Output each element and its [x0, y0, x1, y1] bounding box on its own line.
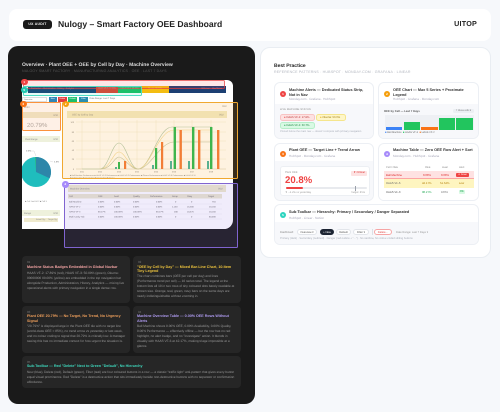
table header: Target Qty	[48, 218, 57, 220]
machine table: 0.00%	[98, 216, 104, 218]
finding body: alongside Production, Administration, History, Analytics — mixing live	[27, 280, 124, 284]
chip: HAAS VF-3	[280, 122, 315, 128]
card title: Not in Nav	[289, 92, 308, 96]
pill: overview: Overview ▾	[300, 231, 314, 234]
card title	[393, 88, 464, 97]
card title: Machine Table — Zero OEE Row Alert + Sort	[393, 148, 473, 152]
status badge: yellow: Okuma: 00.00%	[148, 88, 162, 90]
show cells control	[453, 109, 474, 113]
nav user links: Welcome User Name	[201, 88, 222, 90]
finding title	[137, 264, 231, 273]
card body	[275, 222, 478, 244]
mixed bar and line chart: 20	[72, 158, 75, 161]
machine table: Ball Machine	[69, 200, 82, 204]
target progress bar	[286, 187, 367, 189]
machine table: 20,160	[209, 210, 216, 214]
dashboard screenshot	[22, 80, 233, 229]
finding body	[137, 324, 231, 348]
machine table: 0.00%	[114, 206, 120, 208]
finding title: "OEE by Cell by Day" — Mixed Bar-Line Chart, 10-Item	[137, 264, 231, 268]
mixed bar and line chart: 0/32	[222, 105, 227, 108]
chart card: OEE by Cell by Day	[66, 102, 231, 182]
finding body: The chart combines bars (OEE per cell per day) and lines	[137, 274, 218, 278]
card: sub-toolbar	[274, 204, 479, 245]
finding body: seeing this has no immediate context for how urgent the situation is.	[27, 338, 123, 342]
table header: OEE	[425, 166, 430, 169]
marker 2: 2	[65, 102, 67, 106]
finding title: Plant OEE 20.79% — No Target, No Trend, No Urgency	[27, 314, 121, 318]
machine table: Scrap	[172, 195, 178, 198]
machine table: 100.00%	[114, 210, 123, 214]
machine table: Cell	[69, 195, 73, 198]
pill: filter: Filter ▾	[357, 231, 365, 234]
marker 3: 3	[22, 102, 24, 106]
pie header strip	[22, 136, 60, 142]
target caption: Target: 85%	[351, 190, 365, 194]
bar: HAAS VF-3	[404, 122, 420, 130]
chip: HAAS VF-3: ● HAAS VF-3: 50.7%	[284, 124, 309, 127]
card source: Monday.com · HubSpot · Grafana	[393, 154, 439, 158]
machine table: Machine Overview	[70, 188, 90, 190]
card title: OEE Chart — Max 5 Series + Proximate	[393, 88, 464, 92]
number icon: 2	[386, 92, 388, 96]
mixed bar and line chart: 5/06	[172, 170, 177, 174]
button: new	[49, 97, 56, 102]
strip note: Pinned below the main nav — doesn't compete with primary navigation	[280, 130, 361, 133]
mixed bar and line chart: 80	[72, 131, 75, 134]
finding 5	[22, 356, 241, 388]
finding title	[27, 314, 121, 323]
machine table: 0	[191, 216, 193, 218]
button: default	[68, 97, 77, 102]
finding body: nearly indistinguishable without zooming in.	[137, 294, 198, 298]
pill: new (primary)	[320, 229, 334, 235]
finding body: glance.	[137, 344, 147, 348]
mixed bar and line chart: 5/05	[154, 170, 159, 174]
mixed bar and line chart: 100	[71, 121, 75, 124]
card header strip: 0/32	[53, 212, 58, 214]
panel: dark audit of current design	[8, 46, 255, 404]
finding body: (Performance trend per cell) — 10 series total. The legend at the	[137, 278, 228, 282]
finding body: HAAS VF-2: 17.89% (red), HAAS VF-3: 50.00% (green), Okuma:	[27, 270, 119, 274]
row: HAAS VF-6: HAAS VF-6	[386, 181, 400, 185]
row: HAAS VF-6: 42.17%	[422, 181, 432, 185]
machine table: Quality	[133, 195, 141, 198]
finding number: 01	[27, 260, 30, 264]
machine table: 100.00%	[133, 210, 142, 214]
machine table: HAAS VF-3	[69, 210, 81, 214]
status badge: red: HAAS VF-2: 17.89%	[98, 88, 116, 90]
finding body: screen size. Orange, teal, green, navy bars on the same days are	[137, 288, 230, 292]
status badge: red	[96, 86, 118, 93]
annotation: teal, sub toolbar	[23, 86, 142, 96]
pie chart: 0.0%	[26, 150, 31, 152]
bar: ball machine	[386, 127, 402, 130]
show cells control: 7 Show cells ▾	[456, 109, 471, 112]
finding body: visually with HAAS VF-6 at 42.17%, making triage impossible at a	[137, 338, 230, 342]
machine table: 0	[175, 216, 177, 218]
button: delete	[58, 97, 66, 102]
finding 4	[133, 306, 241, 353]
top navigation bar	[28, 86, 226, 93]
critical badge: ▼ Critical	[353, 171, 365, 174]
row: HAAS VF-3	[386, 189, 465, 194]
KPI tile: Plant OEE	[22, 102, 60, 131]
machine table: Okay	[187, 195, 193, 198]
title: Nulogy – Smart Factory OEE Dashboard	[58, 18, 222, 28]
card body	[379, 161, 478, 200]
machine table: 0.00%	[98, 206, 104, 208]
machine table: 0/32	[218, 188, 223, 190]
machine table: 0.00%	[156, 216, 162, 218]
finding body: affordance.	[27, 380, 43, 384]
card body	[275, 161, 373, 200]
finding number: 04	[138, 310, 141, 314]
button: delete: Delete	[59, 98, 65, 100]
marker 5	[21, 86, 28, 93]
chip: Okuma: ● Okuma: 50.0%	[320, 116, 340, 119]
panel heading: Overview · Plant OEE + OEE by Cell by Day · Machine Overview	[22, 62, 173, 68]
panel: best practice	[260, 47, 491, 258]
card source: Monday.com · Grafana · HubSpot	[289, 97, 335, 101]
chip: HAAS VF-2: ● HAAS VF-2: 17.8%	[284, 116, 309, 119]
card: OEE chart	[378, 82, 479, 139]
date range: Date Range: Last 7 Days	[90, 98, 115, 100]
finding body: bottom lists all 10 in two rows of tiny coloured dots barely readable at	[137, 284, 234, 288]
finding number: 02	[138, 260, 141, 264]
mini chart title: OEE by Cell — Last 7 Days	[384, 109, 420, 113]
card title: Sub-Toolbar — Hierarchy: Primary / Secondary / Danger Separated	[289, 210, 409, 214]
machine table: 288	[174, 210, 178, 214]
sub toolbar	[22, 97, 115, 102]
finding body: (world-class OEE = 85%), no trend arrow vs yesterday or last week,	[27, 328, 123, 332]
table card: Machine Overview	[66, 183, 231, 229]
button: filter: Filter	[81, 98, 86, 100]
toolbar label: Dashboard:	[280, 230, 294, 234]
machine table: 0.00%	[98, 200, 104, 204]
pill: overview	[297, 229, 317, 235]
machine table: 0.00%	[156, 200, 162, 204]
bar: cell 5	[456, 118, 473, 130]
tile header strip	[22, 112, 60, 118]
finding body: New (blue), Delete (red), Default (green), Filter (teal) are four coloured buttons in a row — a classic "traffic light" anti-pattern that gives every button	[27, 370, 234, 374]
mixed bar and line chart: 5/08	[209, 170, 214, 174]
finding body	[137, 274, 234, 298]
mini chart legend: ■ Ball Machine ■ HAAS VF-3 ■ HAAS VF-2	[385, 130, 435, 134]
number icon: 4	[386, 152, 388, 156]
finding body: operational alerts with primary navigation in a single dense row.	[27, 286, 116, 290]
machine table: 0.00%	[156, 206, 162, 208]
KPI label: Plant OEE	[285, 171, 298, 174]
machine table: 20,160	[209, 206, 216, 208]
table header: Actual Qty	[36, 218, 45, 220]
mixed bar and line chart: ■ Ball Machine Performance ■ HAAS VF-2 Performance ■ HAAS VF-3 Performance ■ Okuma Performance ■ HAAS VF-6 Performance ■ HAAS VF-8	[70, 174, 195, 177]
pie chart: 4.9%	[54, 160, 59, 164]
row: HAAS VF-3: OK	[460, 189, 464, 193]
finding body	[27, 324, 126, 343]
mini bar chart	[385, 115, 474, 130]
marker 5: 5	[23, 88, 25, 92]
pie chart: ■ Cell 1 ■ Cell 2 ■ Cell 3	[25, 200, 48, 203]
row: ball machine: 0.00%	[441, 172, 449, 176]
machine table: 0.00%	[133, 200, 139, 204]
number icon: 1	[282, 92, 284, 96]
machine table: OEE	[98, 195, 103, 198]
finding body: 0.00% Performance — effectively offline — but the row has no red	[137, 328, 230, 332]
mixed bar and line chart: 60	[72, 140, 75, 143]
machine table: 2,160	[172, 206, 178, 208]
annotation: red, navbar status	[23, 80, 225, 88]
machine table: 754	[212, 200, 216, 204]
mixed bar and line chart: 0/32	[219, 114, 224, 116]
pill: delete (danger): Delete…	[378, 231, 388, 234]
row: ball machine: Ball Machine	[386, 172, 402, 176]
row: HAAS VF-3: 90.27%	[422, 190, 432, 194]
mixed bar and line chart: 40	[72, 149, 75, 152]
toolbar note: Primary (dark) · Secondary (outlined) · Danger (red outline + "...") · No rainbow, No colour-coded sibling buttons	[280, 237, 413, 240]
status badge: green: HAAS VF-3: 50.00%	[120, 88, 139, 90]
card title: Plant OEE — Target Line + Trend Arrow	[289, 148, 360, 152]
pie chart	[22, 150, 59, 203]
mixed bar and line chart	[67, 105, 227, 180]
select: Overview	[24, 99, 32, 101]
table header: Alert	[459, 166, 464, 169]
machine table: 90.27%	[156, 210, 163, 214]
machine table: 0	[191, 200, 193, 204]
table header	[24, 218, 58, 222]
header bar	[9, 9, 491, 41]
finding body: 00000000 00.00% (yellow) are embedded in the top navigation bar	[27, 276, 121, 280]
finding body	[27, 370, 234, 384]
bar: HAAS VF-2	[421, 126, 438, 130]
mixed bar and line chart: 5/07	[190, 170, 195, 174]
row: ball machine	[384, 170, 474, 179]
card source: HubSpot · Monday.com · Grafana	[289, 154, 335, 158]
machine table	[68, 185, 226, 218]
number icon	[384, 91, 390, 97]
marker 1	[21, 78, 28, 85]
panel heading: Best Practice	[274, 63, 306, 69]
pill: filter	[353, 229, 369, 235]
critical badge	[351, 171, 367, 176]
machine table: Target	[208, 195, 214, 198]
marker 3	[20, 100, 26, 107]
card title: Machine Alerts — Dedicated Status Strip,	[289, 88, 363, 92]
row: HAAS VF-3: 100%	[441, 190, 448, 194]
machine table: 16,380	[187, 206, 194, 208]
card title: Legend	[393, 92, 407, 96]
mixed bar and line chart: 5/03	[117, 170, 122, 174]
number icon	[280, 212, 286, 218]
row: ball machine: ⚠ Down	[458, 172, 467, 176]
finding title	[137, 314, 229, 323]
machine table: 0.00%	[133, 206, 139, 208]
finding body: Ball Machine shows 0.00% OEE, 0.00% Availability, 0.00% Quality,	[137, 324, 231, 328]
KPI value: 20.8%	[285, 175, 312, 186]
finding body: equal visual prominence. Red "Delete" is a destructive action that sits immediately beside non-destructive buttons with no separator or confirmation	[27, 374, 234, 378]
machine table: 90.27%	[98, 210, 105, 214]
marker 2	[62, 100, 69, 107]
pill: delete (danger)	[374, 229, 392, 235]
number icon	[280, 91, 286, 97]
finding body: highlight, no alert badge, and no "investigate" action. It blends in	[137, 334, 228, 338]
row: HAAS VF-6: Low	[459, 181, 464, 185]
trend caption: ▼ −3.2% vs yesterday	[285, 190, 311, 194]
finding number: 03	[27, 310, 30, 314]
pie header strip: 0/32	[53, 138, 58, 140]
finding 1	[22, 256, 130, 303]
finding 3	[22, 306, 130, 353]
chip: HAAS VF-2	[280, 114, 315, 120]
mixed bar and line chart: 5/01	[80, 170, 85, 174]
annotation: amber, OEE chart	[62, 102, 238, 179]
machine table: 0	[175, 200, 177, 204]
status badge: yellow	[141, 86, 169, 93]
mixed bar and line chart: OEE by Cell by Day	[72, 114, 94, 116]
row: HAAS VF-6	[384, 179, 474, 188]
tile header strip: 0/32	[53, 114, 58, 116]
card body	[379, 104, 478, 138]
number icon	[280, 150, 286, 156]
mixed bar and line chart: 5/02	[98, 170, 103, 174]
pill: default	[336, 229, 351, 235]
date range: Date Range: Last 7 Days ▾	[396, 230, 428, 234]
finding number: 05	[27, 360, 30, 364]
card body	[275, 104, 373, 138]
badge: UX audit	[23, 20, 52, 29]
finding 2	[133, 256, 241, 303]
strip label: LIVE MACHINE STATUS	[280, 108, 311, 111]
finding title: Sub-Toolbar — Red "Delete" Next to Green "Default", No Hierarchy	[27, 364, 142, 368]
target marker	[354, 186, 357, 190]
mixed bar and line chart: 0	[73, 168, 75, 171]
machine table: Multi Cavity Tab	[69, 216, 85, 218]
card: machine table	[378, 143, 479, 201]
KPI tile	[280, 166, 370, 196]
card header strip: Range	[24, 212, 31, 214]
lower left table card	[22, 210, 60, 222]
badge: UX audit: UX AUDIT	[28, 22, 47, 26]
card header strip	[22, 210, 60, 216]
row: HAAS VF-3: HAAS VF-3	[386, 190, 400, 194]
pill: default: Default	[339, 231, 348, 234]
separator	[371, 229, 374, 235]
machine table: 0.00%	[114, 200, 120, 204]
marker 4: 4	[64, 182, 66, 186]
mixed bar and line chart: 5/04	[135, 170, 140, 174]
row: HAAS VF-6: 51.52%	[440, 181, 450, 185]
finding body: "20.79%" is displayed large in the Plant OEE tile with no target line	[27, 324, 121, 328]
annotation: orange, plant OEE tile	[22, 102, 61, 131]
chip: Okuma	[316, 114, 346, 120]
card source: HubSpot · Grafana · Monday.com	[393, 97, 439, 101]
panel subheading: REFERENCE PATTERNS · HUBSPOT · MONDAY.COM · GRAFANA · LINEAR	[274, 70, 411, 74]
machine table: Performance	[150, 195, 163, 198]
button: default: Default	[69, 98, 76, 100]
tile label: KOIV	[24, 106, 30, 108]
pill: new (primary): + New	[323, 231, 331, 234]
button: filter	[79, 97, 88, 102]
annotation: purple, machine table	[64, 183, 238, 248]
nav items: Production Administration History Analytics	[31, 88, 74, 90]
bar: cell 4	[439, 118, 455, 130]
progress fill	[286, 187, 303, 189]
machine table: 18,476	[187, 210, 194, 214]
mixed bar and line chart: ■ Ball Machine ■ HAAS VF-2 ■ HAAS VF-3 ■ Okuma	[70, 176, 116, 180]
pie chart card	[22, 136, 60, 203]
number icon	[384, 151, 390, 157]
pie header strip: Oval Range	[25, 138, 38, 140]
brand: UITOP: UITOP	[454, 18, 477, 28]
table header	[386, 166, 464, 169]
finding title: Machine Overview Table — 0.00% OEE Rows Without	[137, 314, 229, 318]
marker 1: 1	[23, 80, 25, 84]
select	[22, 97, 47, 102]
finding title: Signal	[27, 319, 38, 323]
button: new: New	[51, 98, 55, 100]
marker 4	[62, 181, 68, 188]
row: ball machine: 0.00%	[423, 172, 431, 176]
card title	[289, 88, 364, 96]
panel subheading: NULOGY SMART FACTORY · MANUFACTURING ANALYTICS · OEE · LAST 7 DAYS	[22, 68, 167, 72]
machine table: 100.00%	[114, 216, 123, 218]
KPI value: 20.79%	[27, 122, 47, 128]
card: machine alerts	[274, 82, 374, 139]
machine table: 80,000	[209, 216, 216, 218]
card source: HubSpot · Linear · Notion	[289, 216, 324, 220]
table header: Avail	[442, 166, 448, 169]
machine table: HAAS VF-2	[69, 206, 81, 208]
finding body: and no colour coding to signal that 20.79% is critically low. A manager	[27, 334, 125, 338]
number icon: 5	[282, 213, 284, 217]
finding title: Alerts	[137, 319, 147, 323]
finding title: Machine Status Badges Embedded in Global Navbar	[27, 264, 117, 268]
status badge: green	[118, 86, 141, 93]
card: plant OEE	[274, 143, 374, 201]
machine table: 0.00%	[133, 216, 139, 218]
finding title: Tiny Legend	[137, 269, 158, 273]
table header: Cell / OEE	[386, 166, 398, 169]
number icon: 3	[282, 152, 284, 156]
machine table: Avail	[114, 195, 119, 198]
finding body	[27, 270, 124, 290]
